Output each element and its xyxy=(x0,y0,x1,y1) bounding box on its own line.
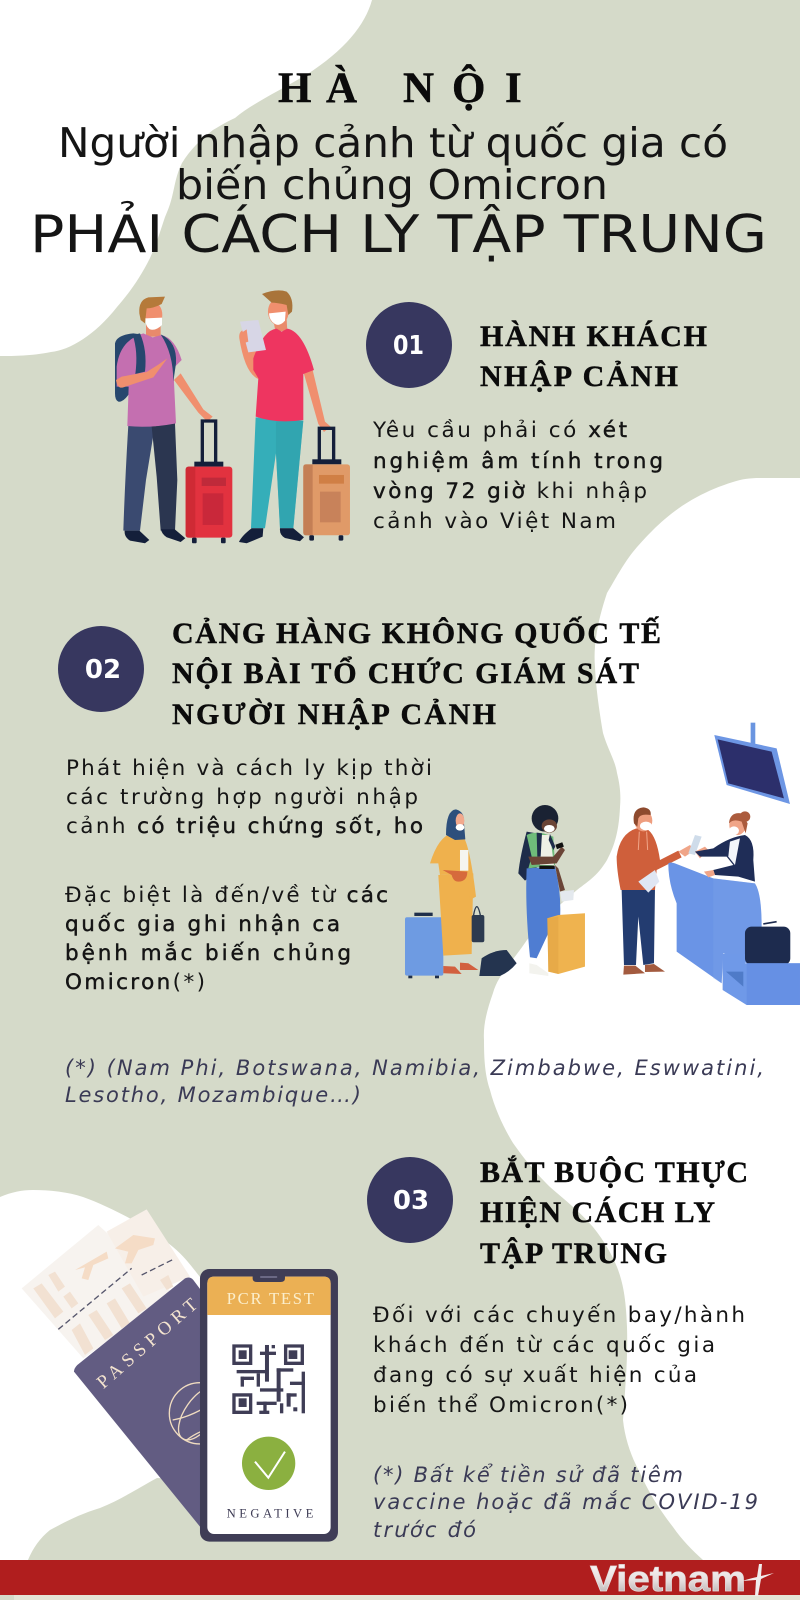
footnote: vaccination xyxy=(373,1463,758,1542)
footer bar with logo: Vietnam xyxy=(590,1558,746,1599)
footnote: country list xyxy=(65,1056,764,1107)
text block 01: nghiệm âm tính trong xyxy=(373,449,663,474)
badge 01: 01 xyxy=(393,331,424,361)
title xyxy=(30,64,767,265)
heading 03: BẮT BUỘC THỰC xyxy=(480,1155,748,1189)
illustration: passport, tickets and PCR phone: NEGATIVE xyxy=(227,1506,314,1520)
text block 01 xyxy=(372,418,663,534)
badge 02: 02 xyxy=(85,655,121,685)
text block 01: cảnh vào Việt Nam xyxy=(373,509,616,534)
heading 02 xyxy=(172,616,661,731)
footer bar with logo xyxy=(0,1558,800,1600)
text block 03: Đối với các chuyến bay/hành xyxy=(373,1303,745,1328)
title: Người nhập cảnh từ quốc gia có xyxy=(58,119,728,167)
text block 03: khách đến từ các quốc gia xyxy=(373,1333,715,1358)
footnote: vaccination: vaccine hoặc đã mắc COVID-19 xyxy=(373,1490,758,1514)
heading 01: HÀNH KHÁCH xyxy=(480,320,707,353)
badge 03: 03 xyxy=(393,1186,429,1216)
heading 01: NHẬP CẢNH xyxy=(480,360,678,393)
title: PHẢI CÁCH LY TẬP TRUNG xyxy=(30,200,767,265)
badge 02 xyxy=(58,626,144,712)
text block 02: các trường hợp người nhập xyxy=(66,785,418,810)
badge 03 xyxy=(367,1157,453,1243)
illustration: passport, tickets and PCR phone: PCR TEST xyxy=(227,1289,314,1308)
text block 02: Omicron(*) xyxy=(65,970,205,995)
footnote: vaccination: trước đó xyxy=(373,1518,476,1542)
title: HÀ NỘI xyxy=(278,64,522,112)
text block 03 xyxy=(373,1303,745,1418)
text block 01: Yêu cầu phải có xét xyxy=(372,418,627,443)
text block 02 xyxy=(65,756,432,995)
illustration: passport, tickets and PCR phone: PASSPORT xyxy=(93,1294,202,1393)
illustration: two travellers with suitcases xyxy=(115,290,350,543)
text block 02: Đặc biệt là đến/về từ các xyxy=(65,883,388,908)
footnote: country list: Lesotho, Mozambique…) xyxy=(65,1083,361,1107)
text block 02: cảnh có triệu chứng sốt, ho xyxy=(66,814,423,839)
text block 02: bệnh mắc biến chủng xyxy=(65,941,351,966)
text block 01: vòng 72 giờ khi nhập xyxy=(373,479,647,504)
illustration: airport check-in queue xyxy=(405,723,800,1005)
title: biến chủng Omicron xyxy=(176,161,608,209)
heading 02: NGƯỜI NHẬP CẢNH xyxy=(172,698,496,731)
heading 02: CẢNG HÀNG KHÔNG QUỐC TẾ xyxy=(172,616,661,650)
illustration: passport, tickets and PCR phone xyxy=(22,1209,338,1542)
text block 03: đang có sự xuất hiện của xyxy=(373,1363,697,1388)
heading 03: TẬP TRUNG xyxy=(480,1237,667,1270)
heading 03 xyxy=(480,1155,748,1270)
text block 03: biến thể Omicron(*) xyxy=(373,1393,628,1418)
heading 03: HIỆN CÁCH LY xyxy=(480,1196,715,1229)
badge 01 xyxy=(366,302,452,388)
text block 02: quốc gia ghi nhận ca xyxy=(65,912,340,937)
footnote: country list: (*) (Nam Phi, Botswana, Namibia, Zimbabwe, Eswwatini, xyxy=(65,1056,764,1080)
heading 02: NỘI BÀI TỔ CHỨC GIÁM SÁT xyxy=(172,656,639,690)
text block 02: Phát hiện và cách ly kịp thời xyxy=(66,756,432,781)
heading 01 xyxy=(480,320,707,393)
footnote: vaccination: (*) Bất kể tiền sử đã tiêm xyxy=(373,1463,683,1487)
